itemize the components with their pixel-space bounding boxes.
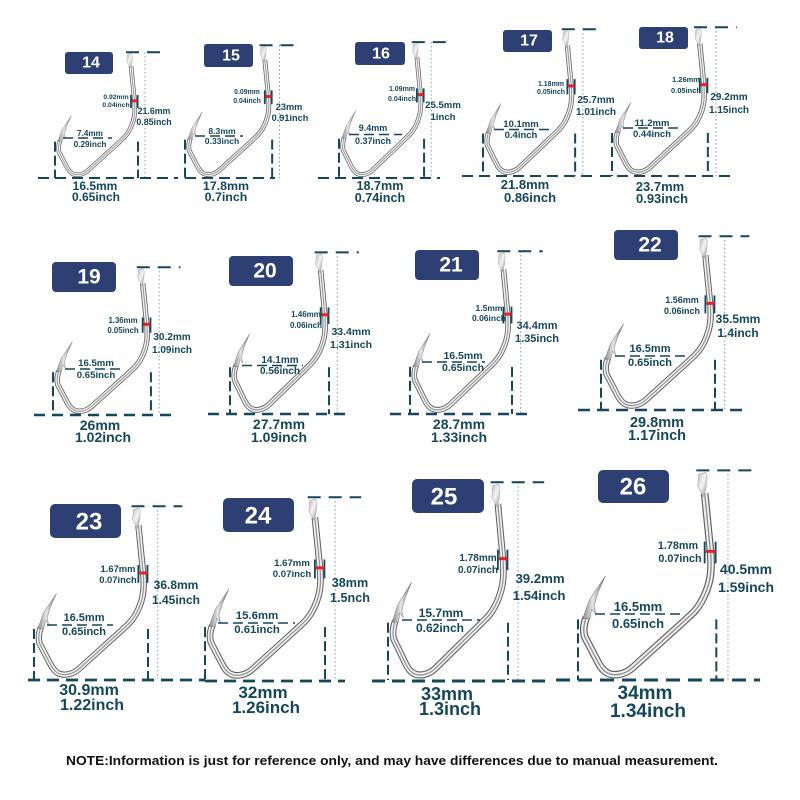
badge 21 [415,250,479,280]
wire label 17: 1.18mm [538,80,564,88]
width label 15: 17.8mm [203,179,249,193]
hook 19 [34,262,192,445]
length label 24: 38mm [332,576,368,590]
wire label 21: 0.06inch [472,313,506,323]
wire label 25: 0.07inch [458,564,498,576]
length label 21: 1.35inch [515,333,559,345]
length label 26: 40.5mm [720,561,772,577]
gap label 25: 0.62inch [416,621,464,635]
badge 14: 14 [82,54,100,72]
hook drawing 23 [34,506,182,679]
gap dimension line 26 [595,613,680,615]
width label 19: 26mm [80,417,120,433]
width label 20: 1.09inch [251,429,307,445]
wire label 20: 1.46mm [291,310,321,318]
length label 16: 1inch [430,112,456,122]
base dimension line 25 [372,680,552,682]
badge 23 [50,504,121,538]
hook drawing 25 [388,482,544,680]
badge 15: 15 [222,48,240,64]
gap label 24: 15.6mm [236,610,278,622]
badge 25: 25 [431,484,457,510]
gap label 20: 14.1mm [261,354,299,366]
gap label 22: 16.5mm [630,343,671,355]
wire label 16: 1.09mm [389,86,415,92]
wire label 24: 1.67mm [274,558,310,568]
base dimension line 22 [578,409,742,411]
length label 22: 35.5mm [716,312,760,326]
gap label 16: 9.4mm [359,123,387,133]
width label 15: 0.7inch [205,190,247,204]
gap label 15: 0.33inch [205,136,239,146]
length label 25: 39.2mm [515,570,565,586]
length label 19: 30.2mm [153,332,191,342]
gap dimension line 24 [218,622,295,624]
hook 17 [462,29,616,204]
gap label 26: 0.65inch [612,616,664,630]
hook drawing 19 [53,267,180,415]
gap label 17: 10.1mm [503,118,539,130]
gap dimension line 15 [195,135,243,137]
gap label 20: 0.56inch [260,366,300,376]
gap dimension line 20 [242,364,303,366]
wire label 16: 0.04inch [388,96,416,102]
gap dimension line 21 [422,361,485,363]
width label 17: 0.86inch [504,190,556,204]
wire label 24: 0.07inch [273,568,311,580]
length label 14: 0.85inch [136,117,172,127]
width label 14: 0.65inch [72,190,120,204]
hook 20 [208,252,372,445]
gap label 15: 8.3mm [208,126,236,136]
badge 17 [503,30,552,52]
base dimension line 16 [318,177,440,179]
length label 18: 1.15inch [709,104,749,116]
hook drawing 26 [578,470,758,680]
width label 24: 32mm [238,682,288,702]
badge 22 [614,230,678,260]
length label 23: 1.45inch [152,593,200,607]
width label 23: 30.9mm [59,682,119,698]
width label 23: 1.22inch [60,696,124,714]
wire label 21: 1.5mm [476,303,503,313]
length label 17: 1.01inch [576,106,616,118]
hook drawing 15 [185,45,298,178]
length label 17: 25.7mm [577,94,615,106]
width label 25: 33mm [421,684,473,704]
base dimension line 20 [208,413,346,415]
badge 16 [355,42,405,65]
hook 24 [205,497,370,716]
hook 26 [556,470,774,722]
width label 18: 23.7mm [636,178,684,194]
gap label 19: 0.65inch [77,370,115,380]
gap label 18: 11.2mm [635,118,669,128]
gap dimension line 19 [65,368,125,370]
width label 24: 1.26inch [232,698,300,716]
base dimension line 19 [34,414,175,416]
base dimension line 18 [600,175,735,177]
width label 26: 34mm [618,682,672,704]
width label 21: 1.33inch [431,429,487,445]
width label 16: 18.7mm [357,179,403,193]
gap dimension line 14 [63,137,112,139]
badge 20 [229,256,293,286]
gap label 18: 0.44inch [633,128,671,140]
hook drawing 24 [205,497,361,680]
length label 25: 1.54inch [513,588,565,602]
gap label 14: 0.29inch [74,140,106,148]
gap label 14: 7.4mm [77,128,103,138]
hook drawing 20 [230,252,359,414]
gap label 21: 16.5mm [443,350,483,362]
length label 20: 1.31inch [330,339,372,351]
wire label 18: 1.26mm [672,74,700,84]
gap label 26: 16.5mm [614,598,662,614]
hook 15 [185,44,309,204]
hook 16 [318,42,461,205]
gap dimension line 18 [623,127,683,129]
gap label 23: 0.65inch [62,626,106,638]
length label 14: 21.6mm [138,106,171,116]
base dimension line 17 [462,175,592,177]
wire label 18: 0.05inch [671,86,701,94]
badge 19: 19 [77,266,101,288]
badge 14 [65,52,113,74]
wire label 23: 1.67mm [101,562,135,574]
badge 15 [204,44,253,67]
width label 19: 1.02inch [75,429,131,445]
width label 25: 1.3inch [419,699,481,719]
hook drawing 16 [339,42,450,178]
badge 24: 24 [245,502,272,530]
width label 22: 1.17inch [628,428,686,444]
gap label 16: 0.37inch [355,136,391,146]
width label 17: 21.8mm [501,176,549,192]
base dimension line 21 [390,413,530,415]
wire label 23: 0.07inch [99,574,137,584]
hook drawing 22 [601,236,749,410]
wire label 19: 1.36mm [108,316,138,324]
hook drawing 21 [410,251,543,414]
width label 14: 16.5mm [73,179,117,193]
base dimension line 24 [205,680,345,682]
badge 22: 22 [638,234,662,256]
width label 21: 28.7mm [433,416,485,432]
width label 26: 1.34inch [610,700,686,722]
length label 26: 1.59inch [718,579,774,595]
wire label 17: 0.05inch [537,88,565,96]
hook drawing 17 [483,29,603,176]
wire label 26: 0.07inch [658,553,702,565]
hook 21 [390,250,559,445]
hook 22 [578,230,760,444]
hook 18 [600,27,749,206]
wire label 20: 0.06inch [290,320,322,330]
badge 25 [412,479,484,513]
gap label 21: 0.65inch [442,362,484,374]
badge 24 [223,498,294,532]
base dimension line 15 [185,177,275,179]
gap label 22: 0.65inch [628,357,672,369]
length label 20: 33.4mm [331,326,371,338]
wire label 26: 1.78mm [658,540,698,552]
wire label 25: 1.78mm [459,552,497,564]
badge 17: 17 [520,32,538,50]
length label 18: 29.2mm [710,92,748,102]
length label 22: 1.4inch [717,326,759,340]
wire label 14: 0.04inch [102,102,130,108]
hook drawing 18 [612,27,737,176]
wire label 19: 0.05inch [107,326,139,334]
badge 16: 16 [372,46,390,62]
wire label 14: 0.92mm [103,94,129,100]
gap label 25: 15.7mm [419,606,463,620]
length label 23: 36.8mm [154,578,198,592]
gap label 17: 0.4inch [505,130,538,140]
length label 15: 23mm [276,102,302,112]
wire label 15: 0.09mm [234,88,260,96]
gap dimension line 16 [349,134,402,136]
gap dimension line 23 [47,624,113,626]
wire label 15: 0.04inch [233,98,261,104]
hook 14 [38,52,178,204]
badge 26: 26 [620,474,646,500]
badge 26 [598,470,669,503]
base dimension line 26 [556,678,760,682]
length label 24: 1.5nch [330,591,370,605]
width label 20: 27.7mm [253,416,305,432]
base dimension line 23 [28,679,205,681]
length label 15: 0.91inch [272,113,309,123]
length label 16: 25.5mm [425,100,461,110]
hook drawing 14 [55,52,163,178]
wire label 22: 1.56mm [665,295,699,305]
badge 21: 21 [439,254,463,276]
badge 19 [52,262,116,292]
gap dimension line 25 [402,619,480,621]
base dimension line 14 [38,177,178,179]
hook 23 [28,504,205,714]
gap dimension line 22 [615,355,685,357]
gap label 24: 0.61inch [234,624,280,636]
length label 21: 34.4mm [517,320,558,332]
badge 20: 20 [253,260,277,282]
wire label 22: 0.06inch [664,306,700,316]
width label 22: 29.8mm [630,415,684,431]
hook 25 [372,479,565,719]
footer note: NOTE:Information is just for reference only, and may have differences due to manual measurement. [66,754,718,768]
badge 23: 23 [76,508,102,536]
width label 18: 0.93inch [636,190,688,206]
badge 18: 18 [656,30,674,46]
gap label 23: 16.5mm [64,612,105,624]
badge 18 [639,27,688,49]
gap label 19: 16.5mm [78,358,114,368]
length label 19: 1.09inch [152,344,192,356]
width label 16: 0.74inch [355,191,405,205]
gap dimension line 17 [494,128,551,130]
